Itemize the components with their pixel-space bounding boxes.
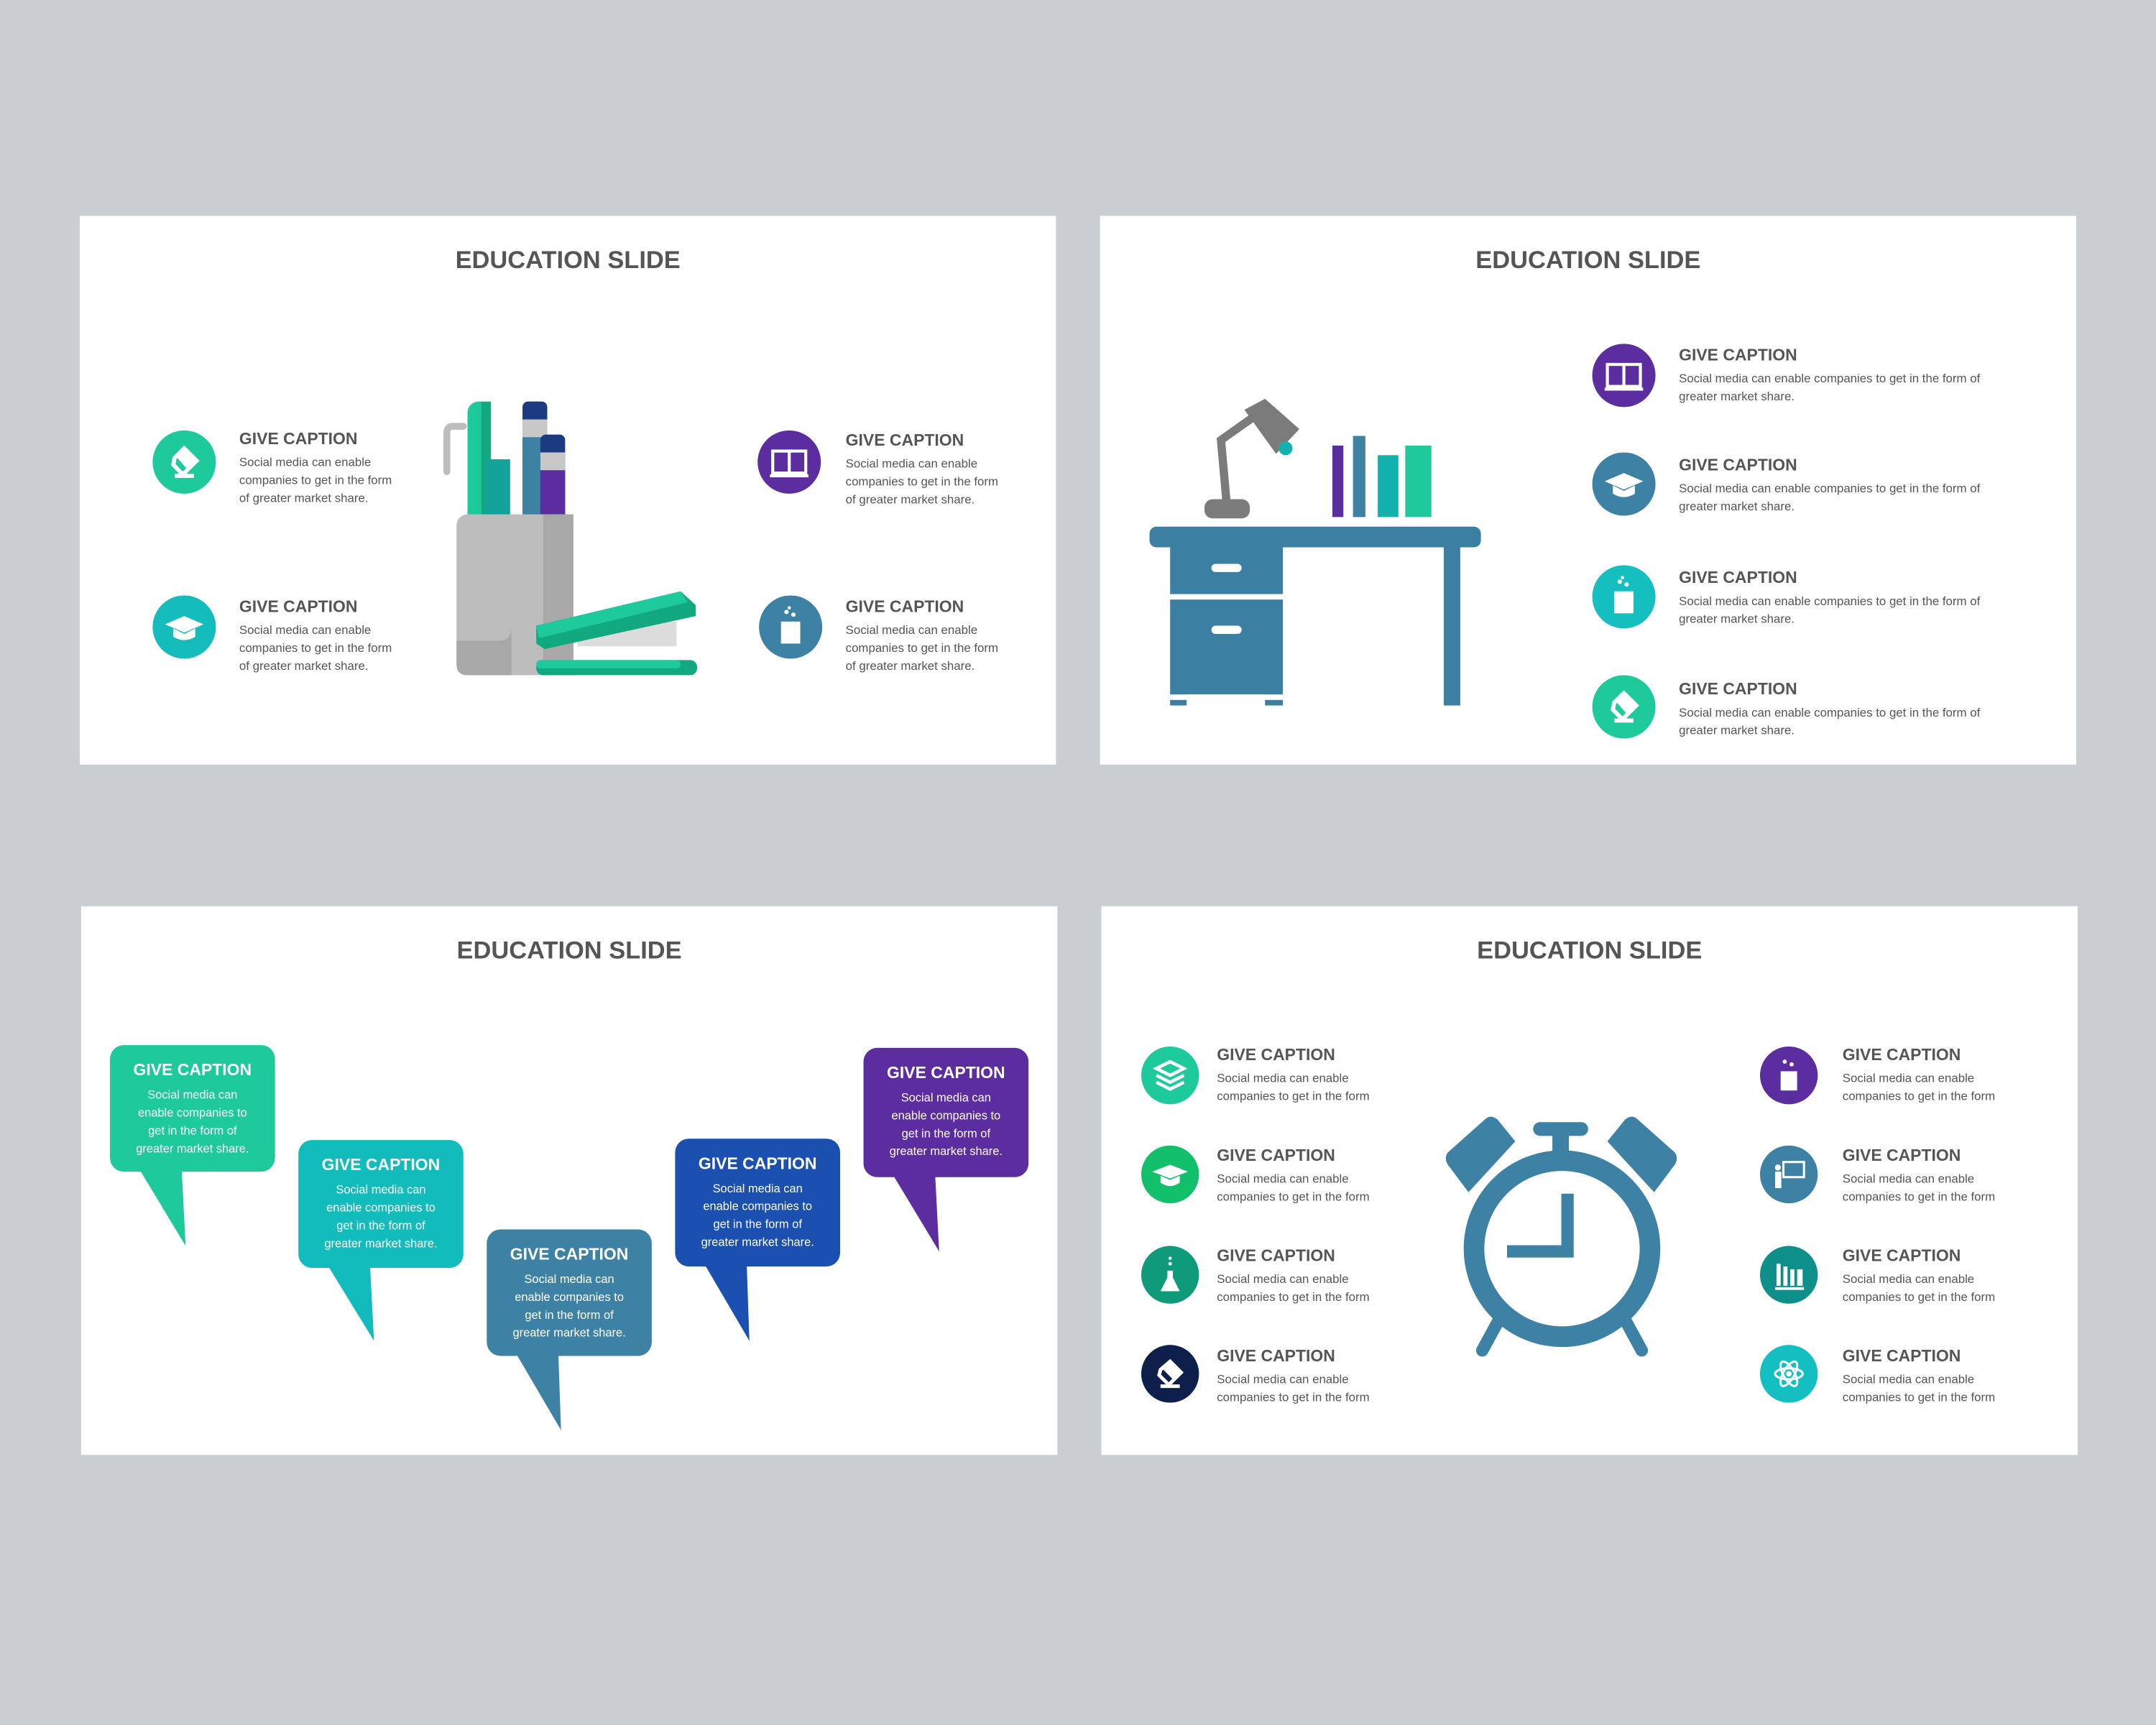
caption R4: Social media can enable bbox=[1843, 1372, 1974, 1386]
illustration: desk with lamp and books bbox=[1150, 398, 1481, 706]
illustration: alarm clock bbox=[1446, 1117, 1677, 1357]
caption 2: Social media can enable bbox=[239, 623, 371, 637]
caption 2: GIVE CAPTION bbox=[239, 597, 357, 616]
caption L3: GIVE CAPTION bbox=[1217, 1246, 1335, 1265]
caption 1: GIVE CAPTION bbox=[1679, 345, 1797, 364]
caption 2 bbox=[1679, 455, 1981, 513]
caption R4: GIVE CAPTION bbox=[1843, 1346, 1961, 1366]
bubble 3: greater market share. bbox=[513, 1325, 626, 1340]
caption R4: companies to get in the form bbox=[1843, 1390, 1995, 1404]
bubble 5: enable companies to bbox=[891, 1108, 1000, 1122]
caption L1: GIVE CAPTION bbox=[1217, 1045, 1335, 1064]
caption 1: Social media can enable companies to get in the form of bbox=[1679, 372, 1980, 385]
title: EDUCATION SLIDE bbox=[1477, 937, 1702, 964]
caption L4: companies to get in the form bbox=[1217, 1390, 1370, 1404]
caption 3: greater market share. bbox=[1679, 612, 1795, 626]
title: EDUCATION SLIDE bbox=[457, 937, 682, 964]
icon: graduation cap bbox=[152, 595, 216, 658]
caption 3: companies to get in the form bbox=[846, 474, 998, 488]
caption 2: companies to get in the form bbox=[239, 641, 392, 655]
bubble 1: greater market share. bbox=[136, 1141, 249, 1155]
caption 4: greater market share. bbox=[1679, 723, 1795, 737]
icon: graduation cap bbox=[1593, 452, 1656, 515]
caption 4: Social media can enable companies to get in the form of bbox=[1679, 706, 1980, 719]
caption 4: companies to get in the form bbox=[846, 641, 998, 655]
bubble 3: enable companies to bbox=[515, 1290, 624, 1304]
bubble 4: greater market share. bbox=[701, 1235, 814, 1248]
caption R1: companies to get in the form bbox=[1843, 1089, 1995, 1103]
bubble 5: GIVE CAPTION bbox=[887, 1063, 1005, 1082]
icon: teacher bbox=[1760, 1146, 1818, 1203]
icon: book bbox=[757, 431, 821, 494]
caption 3 bbox=[1679, 568, 1981, 626]
caption L1: Social media can enable bbox=[1217, 1071, 1349, 1085]
bubble 1: get in the form of bbox=[148, 1123, 237, 1137]
caption R4 bbox=[1843, 1346, 1995, 1404]
bubble 1 bbox=[110, 1045, 275, 1246]
caption R2: GIVE CAPTION bbox=[1843, 1146, 1961, 1165]
title: EDUCATION SLIDE bbox=[456, 246, 681, 274]
caption 2: GIVE CAPTION bbox=[1679, 455, 1797, 474]
caption 3: Social media can enable companies to get in the form of bbox=[1679, 594, 1980, 608]
caption 1: greater market share. bbox=[1679, 389, 1795, 403]
caption 2 bbox=[239, 597, 392, 673]
icon: beaker bbox=[1760, 1046, 1818, 1104]
bubble 3: Social media can bbox=[524, 1272, 614, 1286]
icon: eraser bbox=[1141, 1345, 1199, 1403]
caption L2: companies to get in the form bbox=[1217, 1190, 1370, 1203]
caption R2: companies to get in the form bbox=[1843, 1190, 1995, 1203]
bubble 4: enable companies to bbox=[703, 1199, 812, 1213]
bubble 3: GIVE CAPTION bbox=[510, 1245, 628, 1264]
bubble 2: get in the form of bbox=[336, 1218, 425, 1232]
caption R2 bbox=[1843, 1146, 1995, 1203]
bubble 2: GIVE CAPTION bbox=[322, 1155, 440, 1174]
bubble 5: get in the form of bbox=[902, 1126, 990, 1140]
caption 4: of greater market share. bbox=[846, 658, 975, 673]
icon: books stack bbox=[1141, 1046, 1199, 1104]
bubble 5: Social media can bbox=[901, 1090, 991, 1104]
caption 1: GIVE CAPTION bbox=[239, 429, 357, 448]
caption R1: GIVE CAPTION bbox=[1843, 1045, 1961, 1064]
icon: book bbox=[1593, 344, 1656, 407]
icon: flask bbox=[1141, 1246, 1199, 1304]
bubble 2: greater market share. bbox=[324, 1236, 438, 1250]
bubble 2 bbox=[298, 1140, 464, 1341]
caption R2: Social media can enable bbox=[1843, 1172, 1974, 1185]
icon: beaker bbox=[1593, 565, 1656, 628]
icon: eraser bbox=[1593, 675, 1656, 738]
bubble 4: GIVE CAPTION bbox=[699, 1154, 816, 1173]
caption 4: Social media can enable bbox=[846, 623, 977, 637]
bubble 5 bbox=[864, 1048, 1029, 1251]
bubble 5: greater market share. bbox=[890, 1144, 1003, 1158]
icon: beaker bbox=[759, 595, 822, 658]
caption R3: companies to get in the form bbox=[1843, 1290, 1995, 1304]
panel: desk slide bbox=[1100, 216, 2076, 765]
bubble 1: enable companies to bbox=[138, 1105, 247, 1119]
caption L2: GIVE CAPTION bbox=[1217, 1146, 1335, 1165]
caption 4: GIVE CAPTION bbox=[846, 597, 964, 616]
caption L3 bbox=[1217, 1246, 1370, 1304]
caption R1: Social media can enable bbox=[1843, 1071, 1974, 1085]
caption 2: Social media can enable companies to get in the form of bbox=[1679, 482, 1980, 495]
caption 4 bbox=[1679, 679, 1981, 737]
caption 1: of greater market share. bbox=[239, 491, 369, 505]
panel: pencil holder slide bbox=[80, 216, 1056, 765]
caption 3: GIVE CAPTION bbox=[1679, 568, 1797, 587]
bubble 4 bbox=[675, 1138, 840, 1341]
caption 4 bbox=[846, 597, 998, 673]
title: EDUCATION SLIDE bbox=[1475, 246, 1700, 274]
caption 3: GIVE CAPTION bbox=[846, 431, 964, 450]
caption L4: Social media can enable bbox=[1217, 1372, 1349, 1386]
caption R3: Social media can enable bbox=[1843, 1272, 1974, 1286]
bubble 1: Social media can bbox=[147, 1087, 237, 1102]
caption R3 bbox=[1843, 1246, 1995, 1304]
icon: graduation cap bbox=[1141, 1146, 1199, 1203]
caption L2: Social media can enable bbox=[1217, 1172, 1349, 1185]
caption R1 bbox=[1843, 1045, 1995, 1103]
bubble 1: GIVE CAPTION bbox=[134, 1060, 252, 1080]
caption L1 bbox=[1217, 1045, 1370, 1103]
bubble 3 bbox=[487, 1229, 652, 1430]
caption L3: companies to get in the form bbox=[1217, 1290, 1370, 1304]
caption 1: companies to get in the form bbox=[239, 473, 392, 487]
caption 3: of greater market share. bbox=[846, 492, 975, 506]
panel: speech bubbles slide bbox=[81, 906, 1057, 1455]
bubble 2: Social media can bbox=[336, 1182, 426, 1197]
panel: alarm clock slide bbox=[1102, 906, 2078, 1455]
bubble 4: get in the form of bbox=[714, 1217, 802, 1230]
caption 3 bbox=[846, 431, 998, 506]
bubble 2: enable companies to bbox=[326, 1200, 436, 1214]
icon: eraser bbox=[152, 431, 216, 494]
caption L4: GIVE CAPTION bbox=[1217, 1346, 1335, 1366]
caption 4: GIVE CAPTION bbox=[1679, 679, 1797, 699]
illustration: pen holder and stapler bbox=[443, 401, 697, 676]
caption 2: of greater market share. bbox=[239, 658, 369, 673]
caption 1 bbox=[1679, 345, 1981, 403]
caption 3: Social media can enable bbox=[846, 456, 977, 470]
caption 1 bbox=[239, 429, 392, 505]
caption L3: Social media can enable bbox=[1217, 1272, 1349, 1286]
caption 2: greater market share. bbox=[1679, 500, 1795, 513]
caption 1: Social media can enable bbox=[239, 455, 371, 469]
caption L1: companies to get in the form bbox=[1217, 1089, 1370, 1103]
bubble 3: get in the form of bbox=[525, 1308, 614, 1322]
icon: library bbox=[1760, 1246, 1818, 1304]
bubble 4: Social media can bbox=[713, 1181, 803, 1195]
caption L2 bbox=[1217, 1146, 1370, 1203]
caption L4 bbox=[1217, 1346, 1370, 1404]
icon: atom bbox=[1760, 1345, 1818, 1403]
caption R3: GIVE CAPTION bbox=[1843, 1246, 1961, 1265]
